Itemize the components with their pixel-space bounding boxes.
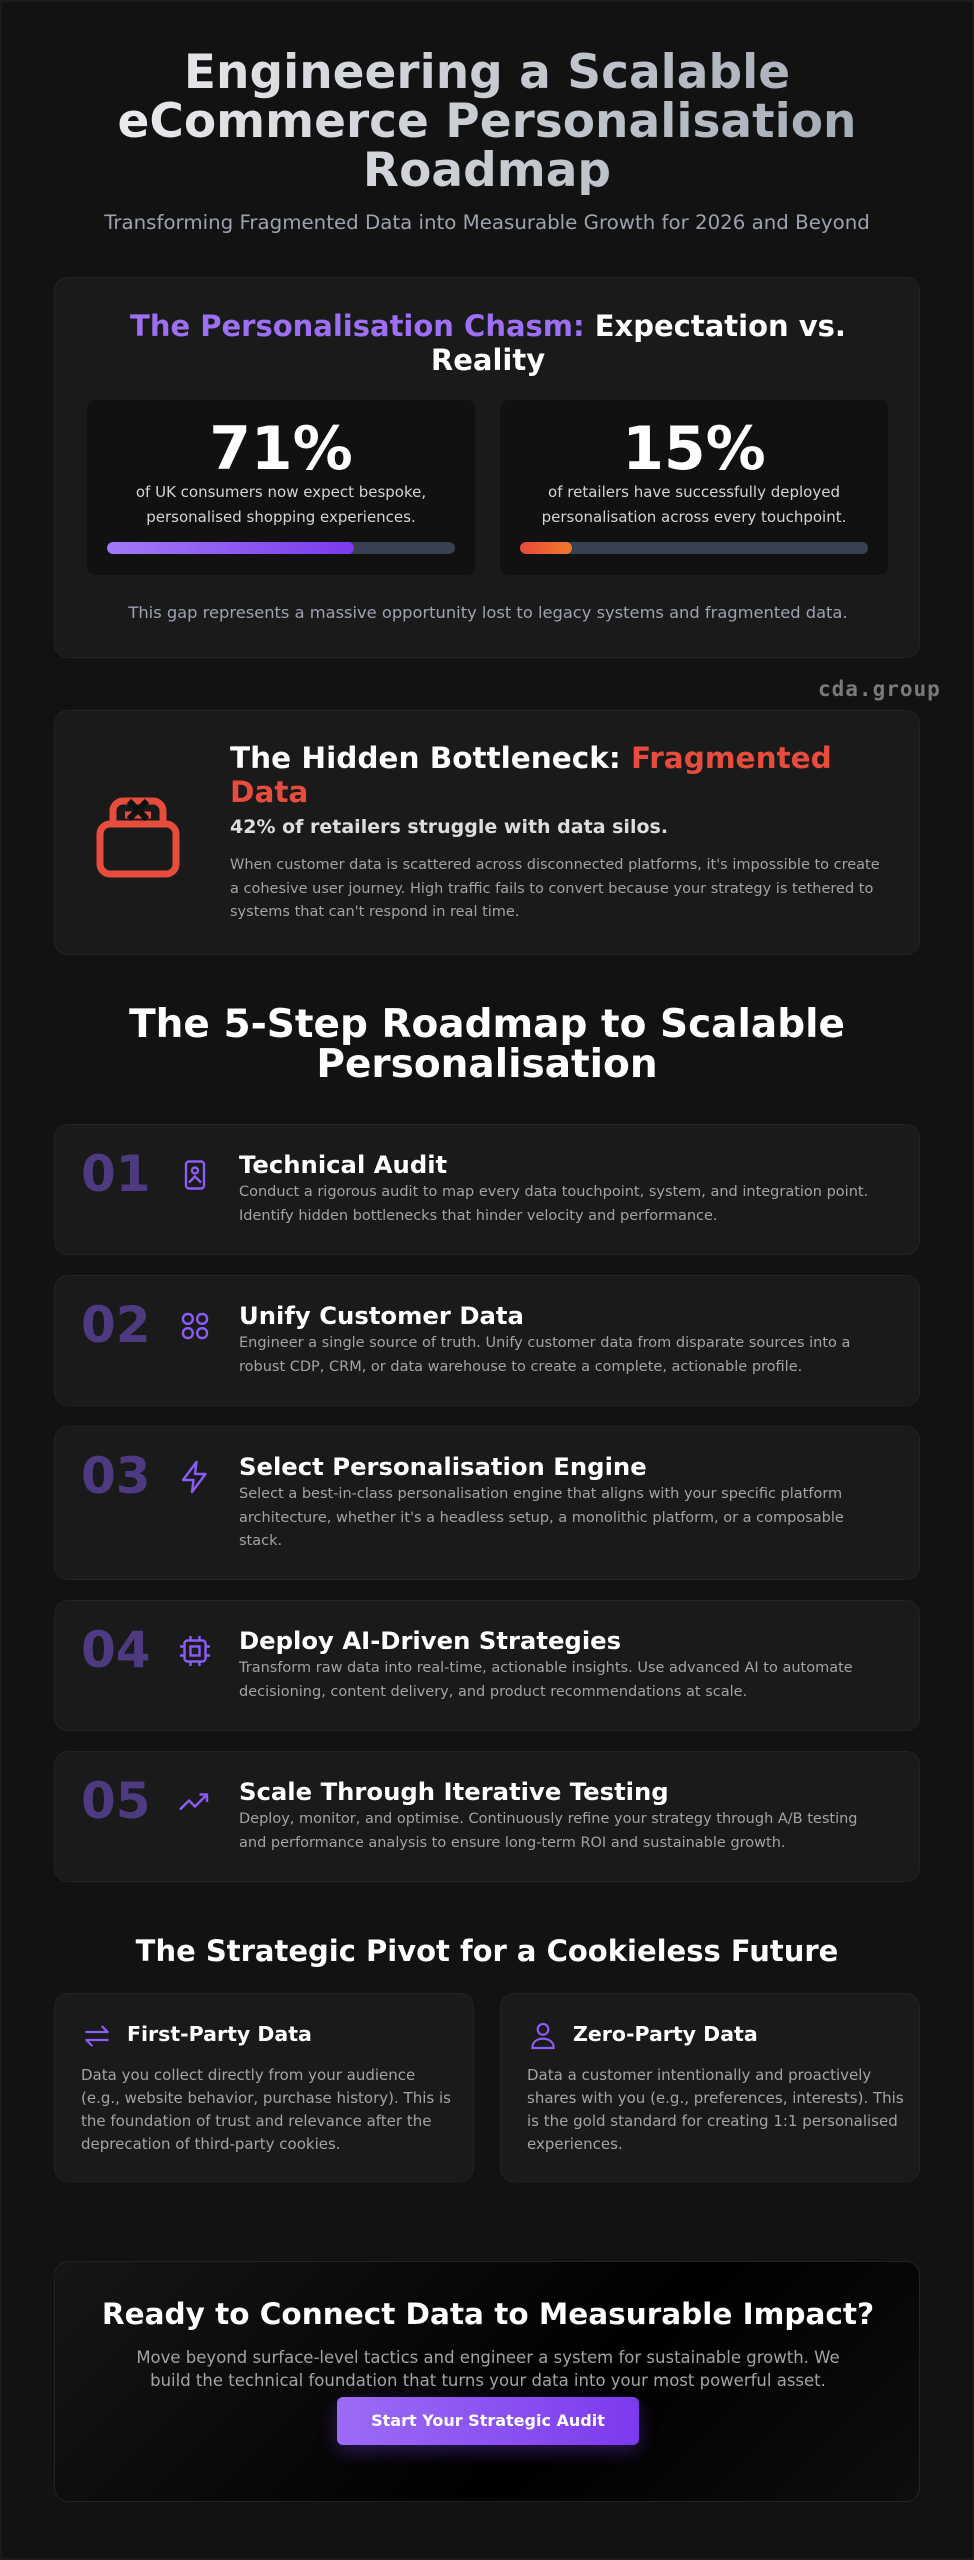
step 02 — [54, 1275, 920, 1406]
step 04: Deploy AI-Driven Strategies — [239, 1626, 621, 1655]
stat: 15%: 15% — [622, 414, 766, 484]
step 03: Select a best-in-class personalisation engine that aligns with your specific platform architecture, whether it's a headless setup, a monolithic platform, or a composable stack. — [239, 1486, 844, 1549]
stat: 15% — [500, 400, 888, 575]
card: first-party data — [54, 1993, 474, 2182]
step 05 — [54, 1751, 920, 1882]
card: first-party data: Data you collect directly from your audience (e.g., website behavior, purchase history). This is the foundation of trust and relevance after the deprecation of third-party cookies. — [81, 2066, 451, 2153]
cta text: Move beyond surface-level tactics and engineer a system for sustainable growth. We — [136, 2348, 840, 2367]
card: first-party data: First-Party Data — [127, 2022, 312, 2046]
bottleneck heading — [230, 741, 832, 809]
bottleneck heading: The Hidden Bottleneck: Fragmented — [230, 741, 832, 775]
card: zero-party data — [500, 1993, 920, 2182]
bottleneck stat: 42% of retailers struggle with data silos. — [230, 816, 668, 838]
step 02: Engineer a single source of truth. Unify customer data from disparate sources into a robust CDP, CRM, or data warehouse to create a complete, actionable profile. — [239, 1335, 850, 1374]
stat: 15%: of retailers have successfully deployed — [548, 483, 840, 501]
stat: 71%: 71% — [209, 414, 353, 484]
card: zero-party data: Zero-Party Data — [573, 2022, 758, 2046]
roadmap heading — [129, 1002, 845, 1087]
cta text: build the technical foundation that turns your data into your most powerful asset. — [150, 2371, 826, 2390]
stat: 15%: personalisation across every touchpoint. — [542, 508, 846, 526]
step 02: 02 — [81, 1296, 151, 1354]
stat: 71% — [87, 400, 475, 575]
icon: trend — [179, 1793, 208, 1810]
step 04: Transform raw data into real-time, actionable insights. Use advanced AI to automate decisioning, content delivery, and product recommendations at scale. — [239, 1660, 853, 1700]
stat: 71%: of UK consumers now expect bespoke, — [136, 483, 426, 501]
step 04 — [54, 1600, 920, 1731]
step 03: Select Personalisation Engine — [239, 1452, 647, 1481]
roadmap heading: Personalisation — [316, 1042, 658, 1087]
chasm heading: The Personalisation Chasm: Expectation vs. — [130, 309, 846, 343]
chasm heading: Reality — [431, 343, 545, 377]
title: Roadmap — [363, 143, 611, 198]
roadmap heading: The 5-Step Roadmap to Scalable — [129, 1002, 845, 1047]
step 02: Unify Customer Data — [239, 1301, 524, 1330]
cta text — [136, 2348, 840, 2390]
step 01: 01 — [81, 1145, 151, 1203]
icon: user — [531, 2022, 555, 2050]
panel: hidden bottleneck — [54, 710, 920, 955]
step 01 — [54, 1124, 920, 1255]
watermark: cda.group — [818, 677, 941, 701]
cta button — [337, 2397, 639, 2445]
step 05: Scale Through Iterative Testing — [239, 1777, 669, 1806]
step 03: 03 — [81, 1447, 151, 1505]
icon: arrows — [85, 2026, 109, 2046]
panel: call to action — [54, 2261, 920, 2502]
bottleneck heading: Data — [230, 775, 308, 809]
icon: chip — [180, 1636, 210, 1666]
cta button: Start Your Strategic Audit — [371, 2411, 605, 2430]
step 05: Deploy, monitor, and optimise. Continuously refine your strategy through A/B testing and performance analysis to ensure long-term ROI and sustainable growth. — [239, 1811, 858, 1850]
subtitle: Transforming Fragmented Data into Measurable Growth for 2026 and Beyond — [104, 211, 870, 234]
gap note: This gap represents a massive opportunity lost to legacy systems and fragmented data. — [128, 603, 848, 622]
step 01: Conduct a rigorous audit to map every data touchpoint, system, and integration point. Identify hidden bottlenecks that hinder velocity and performance. — [239, 1184, 868, 1224]
cookieless heading: The Strategic Pivot for a Cookieless Future — [136, 1934, 838, 1968]
cta heading: Ready to Connect Data to Measurable Impact? — [102, 2297, 874, 2331]
icon: bolt — [182, 1460, 207, 1494]
chasm heading — [130, 309, 846, 377]
step 05: 05 — [81, 1772, 151, 1830]
title: eCommerce Personalisation — [118, 94, 856, 149]
icon: grid — [182, 1312, 208, 1340]
stat: 71%: personalised shopping experiences. — [146, 508, 416, 526]
bottleneck text: When customer data is scattered across disconnected platforms, it's impossible to create a cohesive user journey. High traffic fails to convert because your strategy is tethered to systems that can't respond in real time. — [230, 857, 880, 920]
title — [0, 48, 974, 195]
icon: audit — [184, 1160, 206, 1190]
icon: broken lock — [96, 798, 180, 878]
step 03 — [54, 1426, 920, 1580]
panel: personalisation chasm — [54, 277, 920, 658]
step 04: 04 — [81, 1621, 151, 1679]
title: Engineering a Scalable — [184, 45, 790, 100]
card: zero-party data: Data a customer intentionally and proactively shares with you (e.g., preferences, interests). This is the gold standard for creating 1:1 personalised experiences. — [527, 2066, 904, 2153]
step 01: Technical Audit — [239, 1150, 447, 1179]
